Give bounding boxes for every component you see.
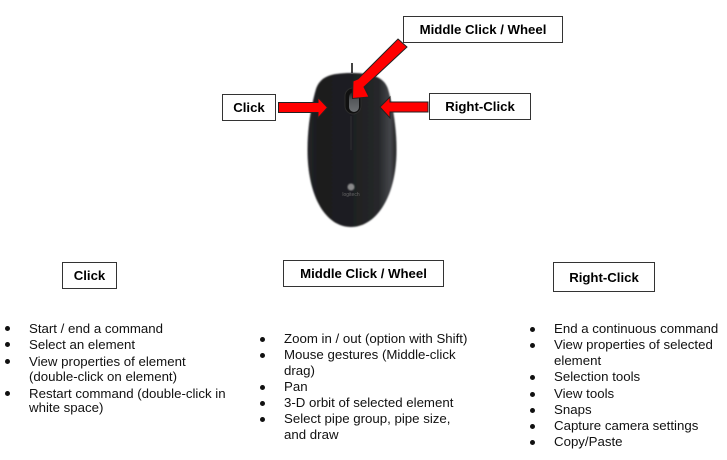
list: right-click actions: element xyxy=(554,353,601,368)
list: click actions: Select an element xyxy=(29,337,135,352)
list: middle click actions: Zoom in / out (option with Shift) xyxy=(284,331,467,346)
mouse body xyxy=(308,73,396,227)
heading: right-click: Right-Click xyxy=(569,270,639,284)
list: right-click actions: Copy/Paste xyxy=(554,434,622,449)
heading: middle click / wheel: Middle Click / Wheel xyxy=(300,266,427,281)
list: click actions xyxy=(5,321,226,415)
mouse wheel xyxy=(345,88,361,114)
mouse cable xyxy=(351,63,353,73)
arrow: middle click xyxy=(352,39,407,98)
list: right-click actions: Capture camera settings xyxy=(554,418,698,433)
list: right-click actions xyxy=(530,321,718,449)
list: middle click actions: Pan xyxy=(284,379,308,394)
heading: click: Click xyxy=(74,268,105,283)
list: middle click actions: Mouse gestures (Middle-click xyxy=(284,347,456,362)
logo xyxy=(348,184,354,190)
icon: computer mouse with arrows xyxy=(278,38,428,228)
list: middle click actions: and draw xyxy=(284,427,339,442)
heading: middle click / wheel xyxy=(283,260,444,287)
heading: click xyxy=(62,262,117,289)
list: right-click actions: End a continuous command xyxy=(554,321,718,336)
arrow: click xyxy=(278,98,328,118)
heading: right-click xyxy=(553,262,655,292)
label: middle click / wheel: Middle Click / Wheel xyxy=(420,22,546,37)
list: right-click actions: View tools xyxy=(554,386,614,401)
label: click: Click xyxy=(233,100,265,115)
list: right-click actions: Snaps xyxy=(554,402,592,417)
list: right-click actions: View properties of selected xyxy=(554,337,713,352)
label: click xyxy=(222,94,276,121)
mouse centre line xyxy=(350,116,352,150)
label: middle click / wheel xyxy=(403,16,563,43)
list: right-click actions: Selection tools xyxy=(554,369,640,384)
list: middle click actions: 3-D orbit of selected element xyxy=(284,395,453,410)
list: middle click actions: Select pipe group, pipe size, xyxy=(284,411,450,426)
label: right-click: Right-Click xyxy=(445,99,515,114)
list: click actions: Restart command (double-click in xyxy=(29,386,226,401)
list: click actions: View properties of element xyxy=(29,354,186,369)
list: click actions: Start / end a command xyxy=(29,321,163,336)
list: middle click actions xyxy=(260,331,467,442)
list: middle click actions: drag) xyxy=(284,363,315,378)
label: right-click xyxy=(429,93,531,120)
list: click actions: (double-click on element) xyxy=(29,369,177,384)
arrow: right-click xyxy=(380,97,428,118)
list: click actions: white space) xyxy=(29,400,103,415)
icon: computer mouse with arrows: logitech xyxy=(342,192,360,198)
